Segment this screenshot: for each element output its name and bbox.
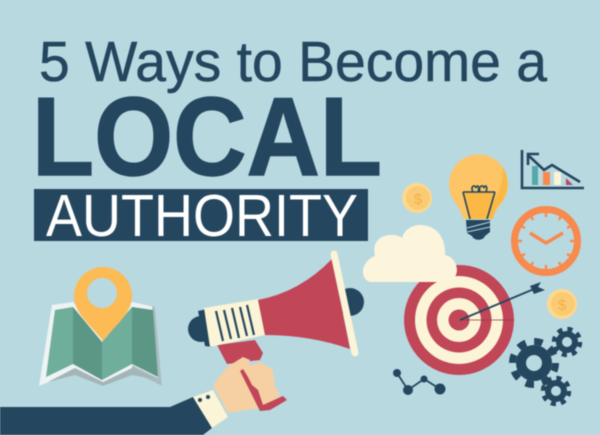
icon: dollar coin left: $ xyxy=(414,191,423,208)
icon: large gear xyxy=(512,342,556,384)
title: 5 Ways to Become a: 5 Ways to Become a xyxy=(39,30,547,94)
icon: small gear bottom xyxy=(543,378,569,404)
megaphone rear bumps xyxy=(188,288,364,347)
megaphone collar xyxy=(204,299,265,347)
icon: small gear top xyxy=(554,329,580,355)
hand xyxy=(213,357,280,413)
icon: connected nodes xyxy=(393,369,446,395)
icon: dollar coin left xyxy=(402,183,432,213)
title banner: AUTHORITY: AUTHORITY xyxy=(46,183,358,249)
megaphone cone xyxy=(258,259,350,349)
lower handle strip xyxy=(240,369,287,411)
megaphone handle xyxy=(217,340,263,364)
icon: clock xyxy=(514,210,578,272)
icon: hand holding megaphone xyxy=(0,254,364,435)
shirt cuff xyxy=(193,390,228,428)
megaphone rim xyxy=(334,254,355,353)
icon: cloud xyxy=(363,225,457,282)
icon: light bulb xyxy=(449,154,508,240)
icon: dollar coin right xyxy=(547,289,577,319)
icon: declining bar chart xyxy=(522,150,584,188)
icon: dollar coin right: $ xyxy=(558,297,567,314)
icon: map with location pin xyxy=(39,267,162,386)
title: LOCAL: LOCAL xyxy=(32,75,382,199)
suit sleeve xyxy=(0,397,212,435)
icon: target with arrow xyxy=(404,265,545,375)
